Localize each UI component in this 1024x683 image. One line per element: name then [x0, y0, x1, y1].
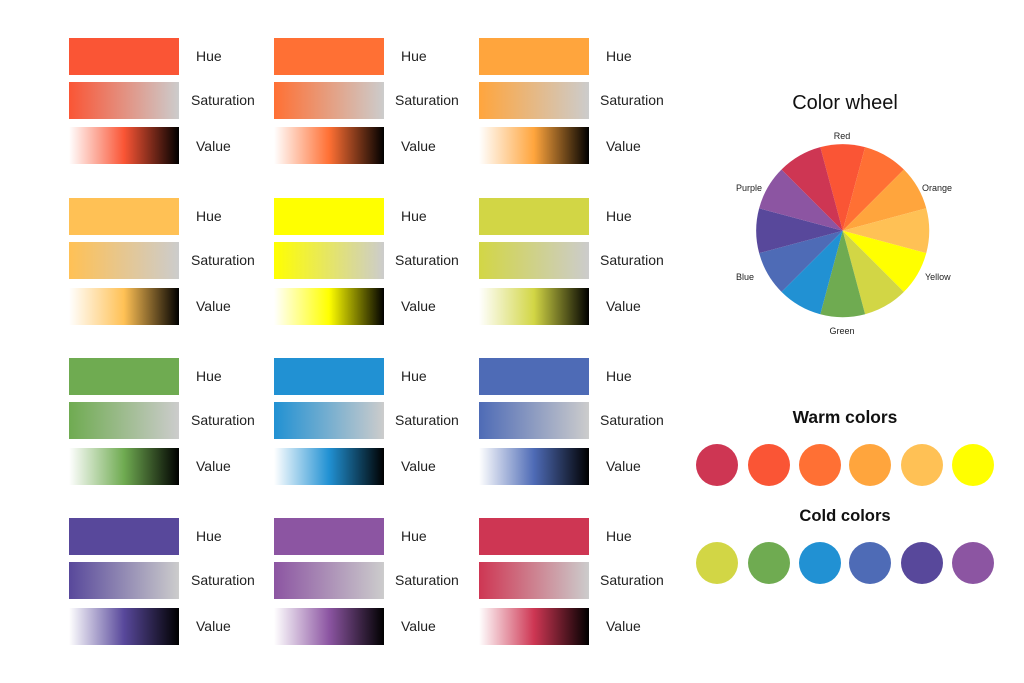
swatch group: crimson: Value — [606, 618, 641, 634]
swatch group: green: Saturation — [191, 412, 255, 428]
swatch group: blue: Value — [606, 458, 641, 474]
swatch group: yellow: Saturation — [395, 252, 459, 268]
heading: color wheel: Color wheel — [792, 92, 898, 114]
swatch group: crimson — [479, 518, 664, 645]
swatch group: purple: Saturation — [395, 572, 459, 588]
swatch group: purple: Hue — [401, 528, 427, 544]
color wheel chart: Yellow — [925, 272, 951, 282]
color wheel chart: Green — [829, 326, 855, 336]
swatch group: purple — [274, 518, 459, 645]
swatch group: crimson: Hue — [606, 528, 632, 544]
swatch group: yellow-orange: Saturation — [191, 252, 255, 268]
swatch group: indigo: Saturation — [191, 572, 255, 588]
swatch group: yellow: Hue — [401, 208, 427, 224]
swatch group: yellow-green: Saturation — [600, 252, 664, 268]
swatch group: indigo: Value — [196, 618, 231, 634]
heading: warm colors: Warm colors — [793, 407, 897, 427]
swatch group: yellow-orange: Value — [196, 298, 231, 314]
swatch group: yellow-orange — [69, 198, 255, 325]
swatch group: indigo — [69, 518, 255, 645]
swatch group: red-orange: Saturation — [395, 92, 459, 108]
swatch group: indigo: Hue — [196, 528, 222, 544]
swatch group: blue: Saturation — [600, 412, 664, 428]
swatch group: cyan-blue: Value — [401, 458, 436, 474]
swatch group: red-orange — [274, 38, 459, 164]
swatch group: red: Saturation — [191, 92, 255, 108]
color wheel chart: Red — [834, 131, 850, 141]
swatch group: green — [69, 358, 255, 485]
swatch group: purple: Value — [401, 618, 436, 634]
color wheel chart — [736, 131, 952, 336]
cold color swatches — [696, 542, 994, 584]
swatch group: blue — [479, 358, 664, 485]
swatch group: yellow — [274, 198, 459, 325]
swatch group: orange — [479, 38, 664, 164]
swatch group: orange: Hue — [606, 48, 632, 64]
color wheel chart: Blue — [736, 272, 754, 282]
swatch group: blue: Hue — [606, 368, 632, 384]
swatch group: yellow-green — [479, 198, 664, 325]
swatch group: red: Hue — [196, 48, 222, 64]
swatch group: red — [69, 38, 255, 164]
swatch group: yellow-green: Value — [606, 298, 641, 314]
swatch group: cyan-blue: Hue — [401, 368, 427, 384]
swatch group: cyan-blue: Saturation — [395, 412, 459, 428]
swatch group: red: Value — [196, 138, 231, 154]
swatch group: green: Value — [196, 458, 231, 474]
swatch group: yellow: Value — [401, 298, 436, 314]
swatch group: cyan-blue — [274, 358, 459, 485]
heading: cold colors: Cold colors — [799, 506, 891, 525]
swatch group: red-orange: Hue — [401, 48, 427, 64]
swatch group: red-orange: Value — [401, 138, 436, 154]
swatch group: green: Hue — [196, 368, 222, 384]
warm color swatches — [696, 444, 994, 486]
swatch group: orange: Value — [606, 138, 641, 154]
swatch group: yellow-orange: Hue — [196, 208, 222, 224]
color wheel chart: Purple — [736, 183, 762, 193]
swatch group: yellow-green: Hue — [606, 208, 632, 224]
swatch group: crimson: Saturation — [600, 572, 664, 588]
color wheel chart: Orange — [922, 183, 952, 193]
swatch group: orange: Saturation — [600, 92, 664, 108]
